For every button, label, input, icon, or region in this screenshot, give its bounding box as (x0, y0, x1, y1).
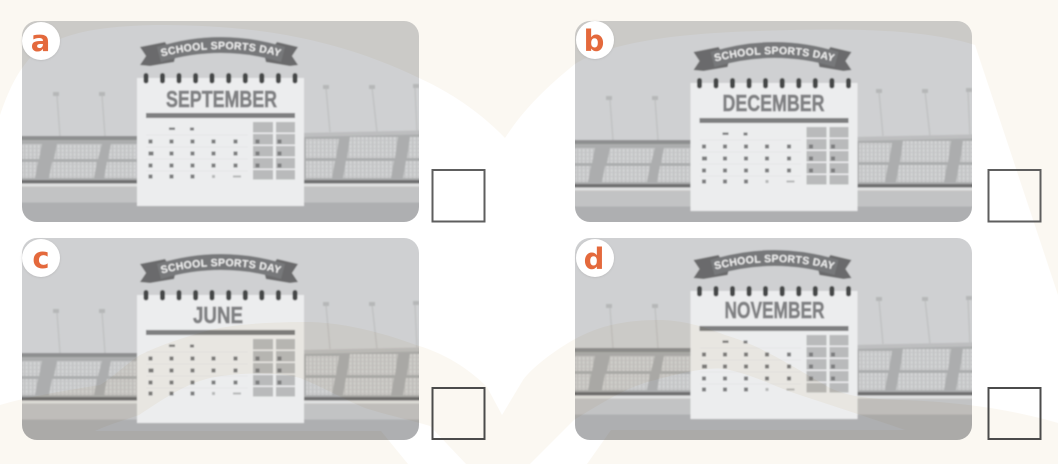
badge b (576, 21, 614, 59)
panel a: September calendar on stadium scene (22, 21, 419, 222)
badge a (22, 22, 60, 60)
badge c: c (32, 241, 50, 275)
answer box b (988, 170, 1040, 222)
badge b: b (584, 24, 604, 58)
month title: December: DECEMBER (722, 90, 825, 116)
ribbon text d: SCHOOL SPORTS DAY (714, 254, 836, 270)
calendar d (689, 249, 859, 420)
ribbon text a: SCHOOL SPORTS DAY (160, 40, 282, 57)
badge c (22, 239, 60, 277)
answer box a (432, 170, 484, 222)
month title: June: JUNE (193, 302, 243, 328)
calendar b (689, 41, 859, 212)
answer box c (432, 388, 484, 439)
panel c: June calendar on stadium scene (22, 238, 419, 440)
panel b: December calendar on stadium scene (575, 21, 972, 222)
month title: September: SEPTEMBER (166, 86, 277, 112)
badge d: d (584, 242, 604, 276)
badge d (576, 239, 614, 277)
ribbon text c: SCHOOL SPORTS DAY (160, 258, 282, 274)
calendar c (136, 253, 306, 424)
badge a: a (31, 24, 50, 58)
calendar a (136, 36, 306, 207)
month title: November: NOVEMBER (724, 297, 825, 323)
ribbon text b: SCHOOL SPORTS DAY (714, 46, 836, 62)
panel d: November calendar on stadium scene (575, 238, 972, 440)
answer box d (988, 388, 1040, 439)
